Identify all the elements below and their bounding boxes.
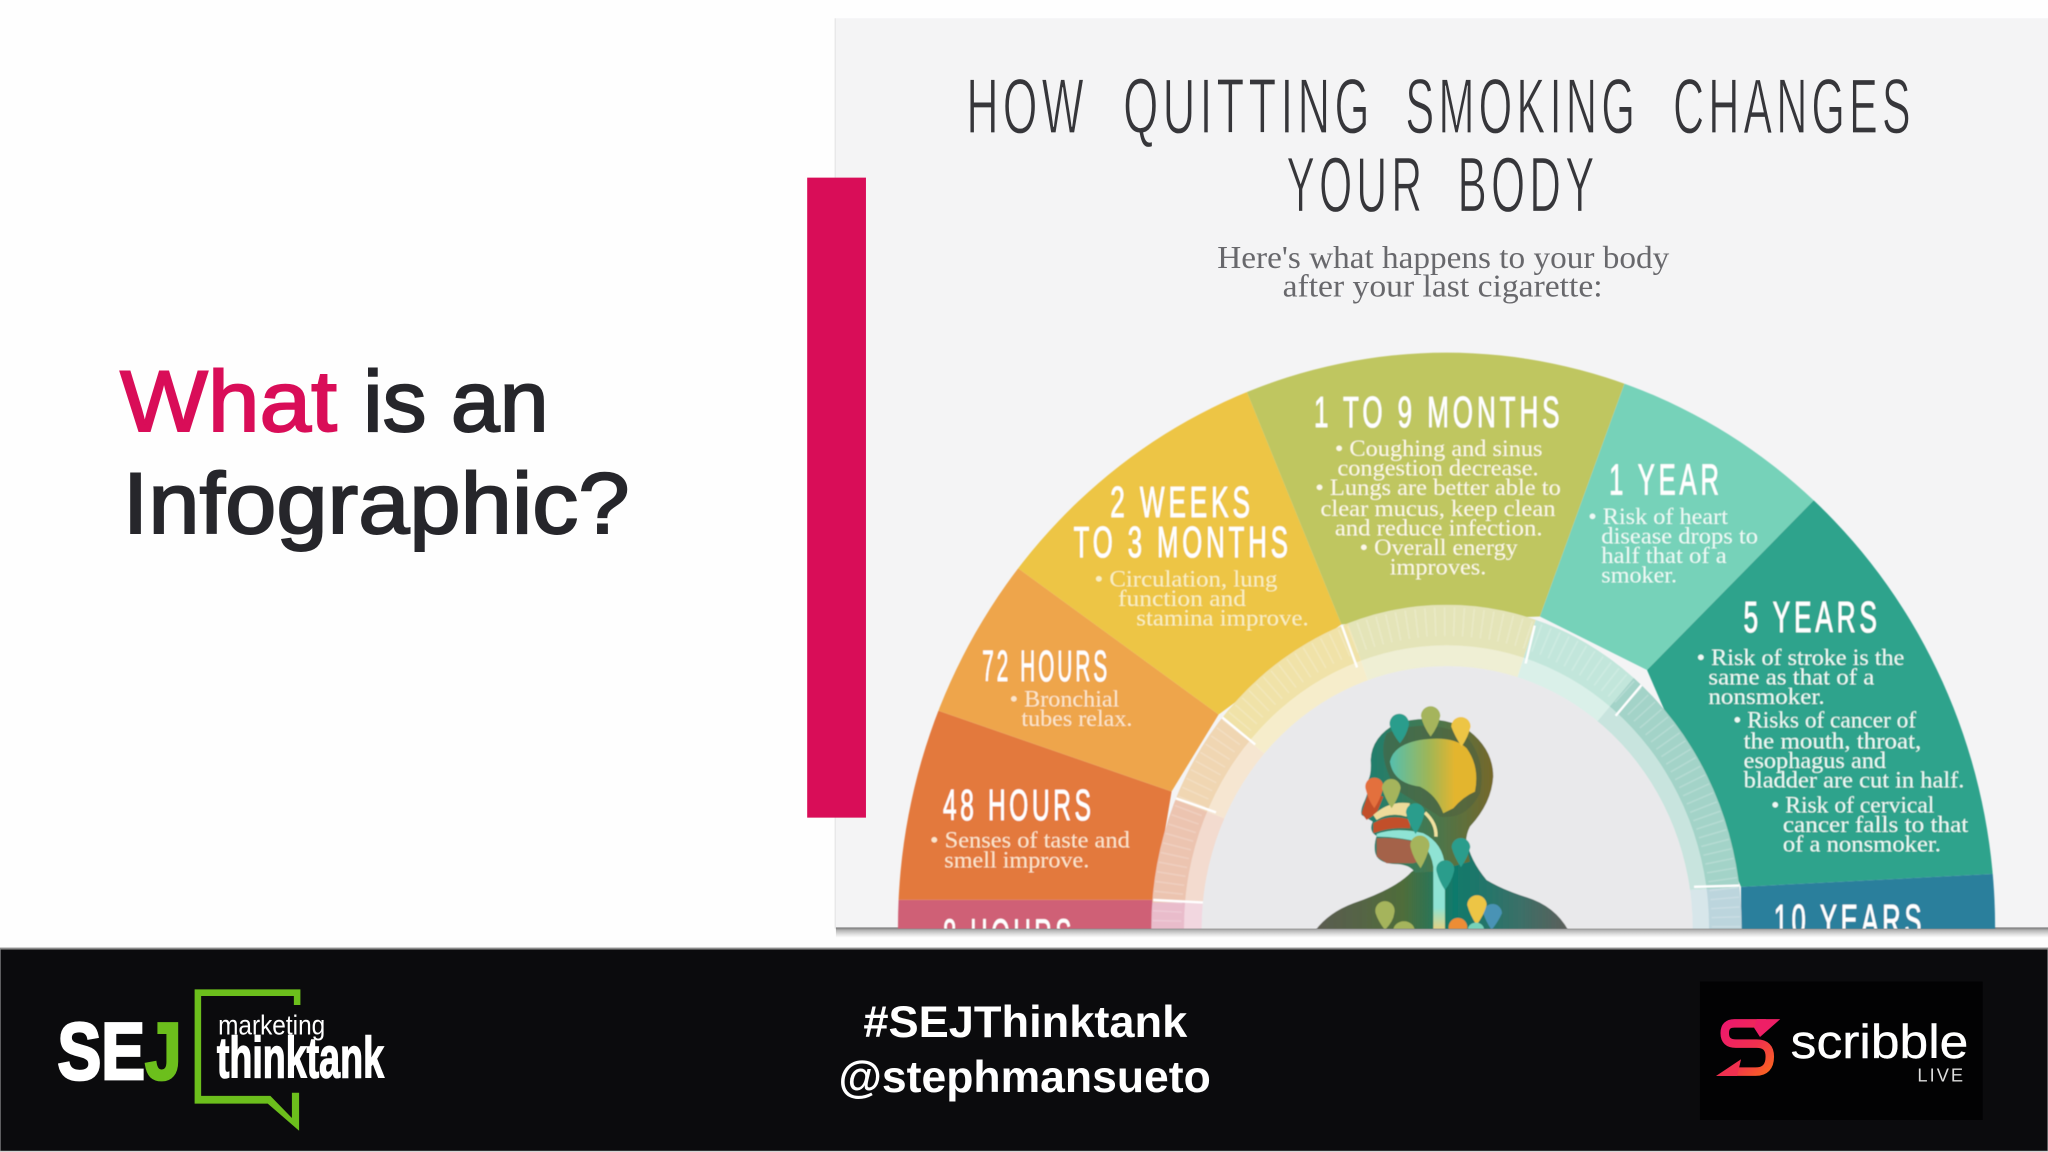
segment: 1 year: disease drops to [1601, 523, 1758, 549]
heading: What is an Infographic? [120, 354, 630, 552]
segment: 1 to 9 months: • Coughing and sinus [1335, 436, 1543, 462]
logo: SEJ marketing thinktank [57, 989, 385, 1131]
heading: What is an Infographic?: Infographic? [123, 456, 630, 552]
segment: 5 years: • Risks of cancer of [1733, 708, 1916, 734]
segment: 5 years: 5 YEARS [1744, 594, 1881, 642]
segment: 8 hours: 8 HOURS [943, 912, 1075, 960]
segment: 5 years [1697, 594, 1969, 858]
infographic title: BODY [1458, 141, 1599, 229]
segment: 48 hours [930, 782, 1130, 873]
segment: 48 hours: 48 HOURS [943, 782, 1095, 830]
thinktank wordmark: thinktank [217, 1027, 385, 1091]
hashtag and handle: @stephmansueto [839, 1053, 1211, 1102]
semicircle timeline chart [897, 352, 1996, 929]
segment: 2 weeks to 3 months [1074, 479, 1309, 632]
segment: 5 years: cancer falls to that [1783, 812, 1969, 838]
infographic subtitle [1217, 240, 1670, 303]
segment: 2 weeks to 3 months: TO 3 MONTHS [1074, 519, 1292, 567]
icon: scribble S mark [1716, 1019, 1780, 1076]
marker pins [1365, 706, 1502, 940]
segment: 5 years: esophagus and [1744, 748, 1886, 774]
infographic title: HOW [967, 62, 1088, 150]
segment: 1 to 9 months: • Lungs are better able to [1315, 475, 1561, 501]
heading: What is an Infographic?: is an [363, 354, 549, 450]
segment: 1 to 9 months: improves. [1390, 555, 1486, 581]
segment: 5 years: nonsmoker. [1708, 684, 1825, 710]
icon: human head and torso [1313, 706, 1570, 940]
segment: 1 year [1588, 456, 1758, 589]
segment: 72 hours: 72 HOURS [982, 643, 1110, 691]
logo: ScribbleLive [1700, 982, 1983, 1120]
tinted inner band [1150, 604, 1742, 929]
segment: 1 to 9 months: congestion decrease. [1337, 455, 1539, 481]
segment: 10 years: 10 YEARS [1774, 897, 1925, 945]
marketing wordmark: marketing [218, 1009, 325, 1040]
infographic subtitle: after your last cigarette: [1283, 268, 1603, 303]
segment: 5 years: the mouth, throat, [1744, 728, 1921, 754]
segment: 48 hours: smell improve. [944, 847, 1089, 873]
accent bar [807, 178, 866, 818]
segment: 2 weeks to 3 months: • Circulation, lung [1095, 566, 1278, 592]
segment: 1 to 9 months: clear mucus, keep clean [1320, 496, 1556, 522]
segment: 5 years: • Risk of stroke is the [1697, 645, 1904, 671]
segment: 1 to 9 months: and reduce infection. [1335, 516, 1543, 542]
segment: 2 weeks to 3 months: 2 WEEKS [1110, 479, 1254, 527]
SEJ wordmark: SEJ [57, 1007, 182, 1097]
infographic title: YOUR [1287, 141, 1426, 229]
infographic subtitle: Here's what happens to your body [1217, 240, 1670, 275]
panel: infographic screenshot card [835, 18, 2048, 960]
segment: 5 years: same as that of a [1708, 664, 1875, 690]
segment: 1 year: half that of a [1601, 543, 1727, 569]
inner circle [1202, 666, 1693, 940]
speech bubble outline [195, 989, 300, 1131]
infographic title: QUITTING [1123, 62, 1374, 150]
infographic title: SMOKING [1405, 62, 1639, 150]
segment: 5 years: of a nonsmoker. [1783, 832, 1941, 858]
segment: 5 years: bladder are cut in half. [1744, 768, 1964, 794]
hashtag and handle: #SEJThinktank [863, 998, 1188, 1047]
segment: 5 years: • Risk of cervical [1771, 792, 1935, 818]
hashtag and handle [839, 998, 1211, 1102]
segment: 48 hours: • Senses of taste and [930, 828, 1130, 854]
heading: What is an Infographic?: What [120, 354, 337, 450]
segment: 2 weeks to 3 months: function and [1118, 586, 1246, 612]
segment: 1 year: 1 YEAR [1609, 456, 1723, 504]
LIVE wordmark: LIVE [1917, 1064, 1967, 1085]
segment: 72 hours: • Bronchial [1010, 687, 1120, 713]
scribble wordmark: scribble [1791, 1015, 1968, 1068]
footer bar [0, 948, 2048, 1151]
coloured timeline wedges [897, 352, 1996, 929]
segment: 1 year: smoker. [1601, 563, 1677, 589]
segment: 1 to 9 months: 1 TO 9 MONTHS [1314, 389, 1563, 437]
segment: 1 to 9 months [1314, 389, 1563, 581]
segment: 2 weeks to 3 months: stamina improve. [1136, 606, 1309, 632]
segment: 1 to 9 months: • Overall energy [1360, 535, 1518, 561]
infographic title [967, 62, 1915, 229]
segment: 1 year: • Risk of heart [1588, 504, 1728, 530]
segment: 72 hours: tubes relax. [1021, 706, 1132, 732]
segment: 72 hours [982, 649, 1132, 727]
